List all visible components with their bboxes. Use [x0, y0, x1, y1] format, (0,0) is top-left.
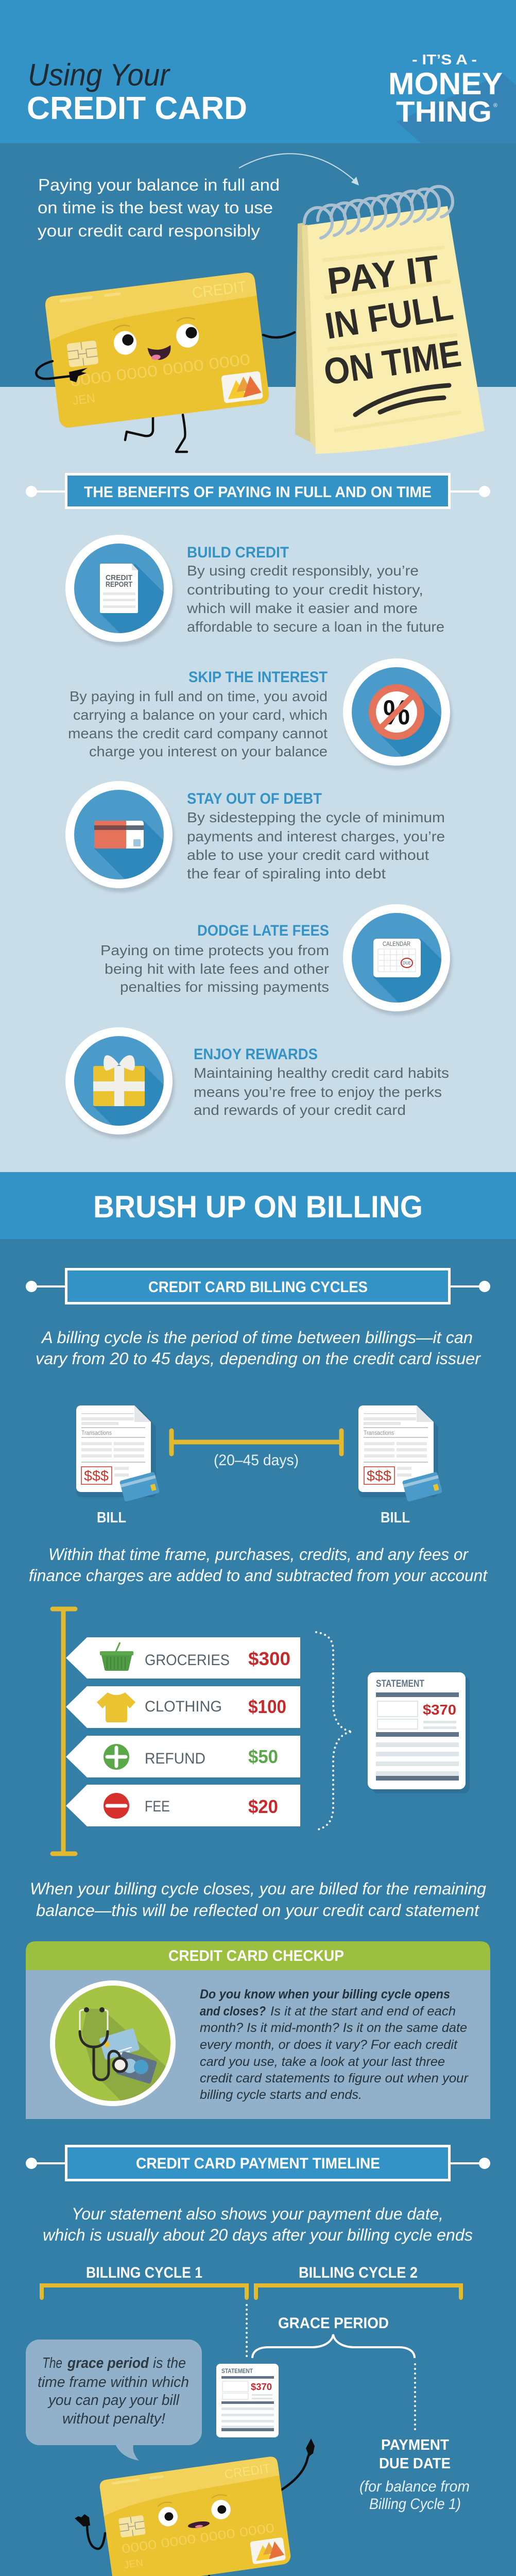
tag: groceries: $300: [248, 1648, 290, 1669]
text: checkup questions: Is it at the start and end of each: [270, 2004, 456, 2019]
text: statement due date: Your statement also shows your payment due date,: [72, 2205, 443, 2223]
icon: stethoscope and card: [50, 1980, 176, 2106]
illustration: waving credit card character: JEN: [123, 2557, 144, 2571]
panel: credit card checkup 1: [26, 1941, 490, 2136]
icon: credit report: [65, 535, 175, 647]
section heading: credit card billing cycles: CREDIT CARD BILLING CYCLES: [148, 1279, 368, 1296]
illustration: notepad reading pay it in full on time: [295, 187, 485, 454]
icon: calendar: CALENDAR: [383, 940, 410, 947]
tag: refund: $50: [248, 1746, 278, 1767]
speech bubble: grace period: is the: [153, 2355, 186, 2371]
chart: 20 to 45 day span bar: (20–45 days): [214, 1452, 299, 1469]
benefit: dodge late fees: Paying on time protects you from: [100, 942, 329, 958]
timeline: billing cycle brackets: BILLING CYCLE 2: [299, 2264, 418, 2281]
icon: first bill: Transactions: [81, 1429, 112, 1436]
chart: 20 to 45 day span bar: [171, 1431, 341, 1469]
heading: brush up on billing: BRUSH UP ON BILLING: [93, 1190, 423, 1224]
section heading: credit card payment timeline: [26, 2146, 490, 2180]
benefit: skip the interest: carrying a balance on your card, which: [73, 707, 328, 723]
text: when your billing cycle closes: [30, 1879, 486, 1920]
section heading: credit card payment timeline: CREDIT CARD PAYMENT TIMELINE: [136, 2155, 380, 2172]
icon: basket: [100, 1642, 133, 1671]
icon: credit report: CREDIT: [106, 573, 132, 582]
text: checkup questions: [200, 1987, 469, 2102]
benefit: dodge late fees: DODGE LATE FEES: [197, 922, 329, 939]
label: payment due date: DUE DATE: [379, 2455, 451, 2472]
label: payment due date: Billing Cycle 1): [369, 2496, 461, 2513]
text: billing cycle definition: vary from 20 to 45 days, depending on the credit card issuer: [36, 1349, 481, 1368]
icon: mini statement $370: STATEMENT: [221, 2367, 253, 2375]
panel: credit card checkup 1: CREDIT CARD CHECKUP: [168, 1947, 344, 1964]
section heading: benefits: [26, 474, 490, 508]
tag: groceries: [66, 1637, 300, 1679]
text: statement due date: [43, 2205, 473, 2244]
benefit: build credit: BUILD CREDIT: [187, 544, 289, 561]
icon: first bill: [76, 1405, 160, 1502]
icon: calendar: DUE: [403, 961, 411, 965]
logo: It's a Money Thing: THING: [396, 95, 492, 128]
timeline: grace period brace: GRACE PERIOD: [278, 2315, 389, 2332]
section heading: credit card billing cycles: [26, 1269, 490, 1303]
intro text: Paying your balance in full and: [38, 176, 280, 194]
intro text: [38, 176, 280, 240]
timeline: billing cycle brackets: [42, 2264, 461, 2298]
bracket: dotted brace: [316, 1632, 352, 1830]
tag: clothing: CLOTHING: [145, 1698, 222, 1715]
icon: second bill: Transactions: [364, 1429, 394, 1436]
text: within that time frame: [29, 1545, 488, 1585]
tag: refund: REFUND: [145, 1750, 205, 1767]
chart: vertical timeline post: [53, 1609, 75, 1854]
timeline: grace period brace: [247, 2305, 415, 2430]
icon: statement $370: STATEMENT: [376, 1679, 424, 1689]
benefit: dodge late fees: [102, 904, 453, 1016]
text: within that time frame: Within that time frame, purchases, credits, and any fees or: [48, 1545, 469, 1564]
tag: fee: [66, 1785, 300, 1826]
illustration: waving credit card character: 0000 0000 0000 0000: [121, 2521, 276, 2556]
illustration: smiling credit card character: CREDIT: [191, 278, 247, 302]
icon: no percent sign: %: [383, 693, 410, 732]
illustration: smiling credit card character: JEN: [72, 392, 96, 408]
icon: calendar: [343, 904, 453, 1016]
section heading: benefits: THE BENEFITS OF PAYING IN FULL AND ON TIME: [84, 484, 432, 501]
benefit: stay out of debt: able to use your credit card without: [187, 847, 429, 863]
speech bubble: grace period: time frame within which: [38, 2374, 189, 2391]
icon: t-shirt: [97, 1692, 135, 1722]
speech bubble: grace period: you can pay your bill: [47, 2392, 180, 2409]
text: within that time frame: finance charges are added to and subtracted from your account: [29, 1566, 488, 1585]
icon: second bill: [358, 1405, 442, 1502]
illustration: waving credit card character: CREDIT: [223, 2461, 271, 2482]
benefit: stay out of debt: [65, 781, 444, 893]
benefit: skip the interest: means the credit card company cannot: [68, 725, 328, 741]
tag: groceries: GROCERIES: [145, 1652, 230, 1669]
text: statement due date: which is usually about 20 days after your billing cycle ends: [43, 2226, 473, 2244]
label: bill: [97, 1510, 410, 1526]
text: checkup questions: and closes?: [200, 2004, 266, 2019]
timeline: billing cycle brackets: BILLING CYCLE 1: [86, 2264, 202, 2281]
text: checkup questions: Do you know when your billing cycle opens: [200, 1987, 450, 2002]
title: [27, 58, 247, 126]
text: checkup questions: month? Is it mid-month? Is it on the same date: [200, 2021, 467, 2035]
text: checkup questions: card you use, take a look at your last three: [200, 2055, 445, 2069]
label: payment due date: (for balance from: [359, 2478, 470, 2495]
illustration: notepad reading pay it in full on time: ON TIME: [321, 333, 464, 393]
illustration: waving credit card character: [75, 2438, 315, 2576]
tag: fee: FEE: [145, 1798, 170, 1815]
benefit: stay out of debt: the fear of spiraling into debt: [187, 866, 386, 882]
illustration: smiling credit card character: [36, 272, 295, 452]
benefit: enjoy rewards: means you’re free to enjoy the perks: [194, 1084, 442, 1100]
title: Using Your: [28, 58, 170, 92]
benefit: build credit: affordable to secure a loan in the future: [187, 619, 444, 635]
tag: clothing: $100: [248, 1696, 286, 1717]
benefit: build credit: [65, 535, 444, 647]
illustration: smiling credit card character: 0000 0000 0000 0000: [69, 351, 251, 390]
benefit: build credit: By using credit responsibly, you’re: [187, 563, 419, 579]
label: bill: BILL: [97, 1510, 126, 1526]
speech bubble: grace period: without penalty!: [62, 2411, 165, 2427]
tag: fee: $20: [248, 1796, 278, 1817]
benefit: build credit: which will make it easier and more: [186, 600, 418, 616]
logo: It's a Money Thing: ®: [493, 103, 497, 109]
benefit: skip the interest: SKIP THE INTEREST: [188, 669, 328, 686]
icon: minus: [104, 1793, 129, 1819]
benefit: skip the interest: By paying in full and on time, you avoid: [70, 688, 328, 704]
benefit: enjoy rewards: and rewards of your credit card: [194, 1102, 406, 1118]
benefit: stay out of debt: payments and interest charges, you’re: [187, 828, 445, 844]
text: billing cycle definition: A billing cycle is the period of time between billings—it can: [41, 1328, 473, 1347]
icon: credit report: REPORT: [106, 580, 132, 589]
logo: It's a Money Thing: - IT’S A -: [412, 52, 477, 67]
intro text: your credit card responsibly: [38, 222, 260, 240]
icon: mini statement $370: [216, 2364, 279, 2437]
benefit: stay out of debt: By sidestepping the cycle of minimum: [187, 809, 445, 825]
benefit: dodge late fees: being hit with late fees and other: [105, 961, 329, 977]
title: CREDIT CARD: [27, 91, 247, 126]
speech bubble: grace period: [26, 2340, 202, 2461]
benefit: enjoy rewards: [65, 1027, 449, 1140]
label: bill: BILL: [381, 1510, 410, 1526]
logo: It's a Money Thing: MONEY: [388, 66, 503, 101]
label: payment due date: PAYMENT: [381, 2437, 449, 2453]
intro text: on time is the best way to use: [38, 198, 273, 217]
speech bubble: grace period: grace period: [67, 2355, 149, 2371]
icon: first bill: $$$: [84, 1468, 109, 1484]
text: billing cycle definition: [36, 1328, 481, 1368]
text: checkup questions: billing cycle starts and ends.: [200, 2088, 362, 2102]
benefit: build credit: contributing to your credit history,: [187, 582, 423, 598]
icon: red credit card: [65, 781, 175, 893]
benefit: stay out of debt: STAY OUT OF DEBT: [187, 790, 322, 807]
icon: plus: [104, 1744, 129, 1770]
arrow: curved arrow to notepad: [239, 154, 359, 185]
illustration: notepad reading pay it in full on time: IN FULL: [322, 286, 456, 347]
icon: mini statement $370: $370: [251, 2382, 272, 2392]
text: checkup questions: every month, or does it vary? For each credit: [200, 2038, 458, 2052]
icon: statement $370: [368, 1672, 470, 1793]
benefit: enjoy rewards: ENJOY REWARDS: [194, 1046, 318, 1063]
icon: second bill: $$$: [367, 1468, 391, 1484]
speech bubble: grace period: The: [42, 2355, 62, 2371]
text: when your billing cycle closes: When your billing cycle closes, you are billed for the remaining: [30, 1879, 486, 1898]
tag: refund: [66, 1736, 300, 1777]
benefit: skip the interest: [69, 658, 453, 771]
label: payment due date: [359, 2437, 470, 2513]
icon: no percent sign: [343, 658, 453, 771]
text: when your billing cycle closes: balance—this will be reflected on your credit card statement: [36, 1901, 479, 1920]
text: checkup questions: credit card statements to figure out when your: [200, 2071, 469, 2086]
benefit: skip the interest: charge you interest on your balance: [89, 743, 328, 759]
illustration: notepad reading pay it in full on time: PAY IT: [325, 248, 441, 302]
icon: gift box: [65, 1027, 175, 1140]
benefit: enjoy rewards: Maintaining healthy credit card habits: [194, 1065, 449, 1081]
icon: statement $370: $370: [423, 1702, 456, 1718]
logo: It's a Money Thing: [388, 52, 516, 143]
benefit: dodge late fees: penalties for missing payments: [120, 979, 329, 995]
tag: clothing: [66, 1686, 300, 1728]
